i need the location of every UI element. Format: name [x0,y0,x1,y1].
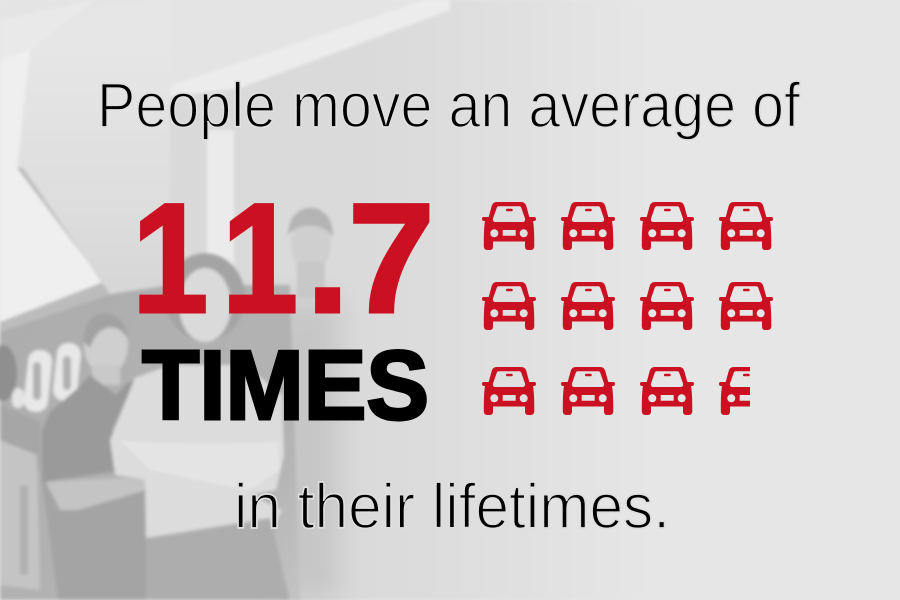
car row 3 with partial car [482,367,773,415]
pictogram: 11.7 cars [482,202,773,415]
big number 11.7: 7 [348,172,435,346]
big logo digits [12,388,24,408]
woman trousers [146,518,290,600]
big number 11.7: 11 [132,172,298,346]
box [0,440,40,590]
man polo [84,315,128,375]
light left panel [0,50,103,322]
bearded man behind [291,217,331,271]
car row 2 [482,282,773,330]
car row 1 [482,202,773,250]
big number 11.7 [132,172,435,346]
soft shadow behind the group [270,300,340,600]
woman sweater [110,365,284,540]
closing text: in their lifetimes.: in their lifetimes. [234,472,670,542]
chevron dark border [0,168,110,332]
heading: people move an average of: People move an average of [97,71,800,141]
chevron panel [17,0,170,320]
light door post [207,130,234,300]
woman hair and face [165,253,245,341]
diagonal light band [170,0,450,97]
TIMES label: TIMES [142,330,429,440]
truck upper panel [0,0,433,300]
truck lower dark side [0,285,300,600]
big number 11.7: . [306,172,349,346]
left man [0,345,17,401]
